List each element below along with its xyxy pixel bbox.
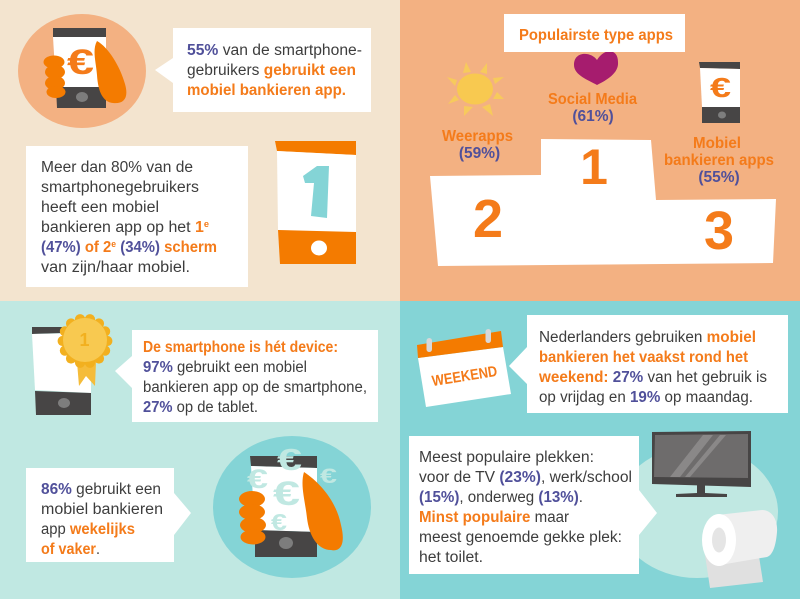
podium: 2 [473,189,503,249]
text block: first or second screen: scherm [164,239,217,256]
callout: popular places: Meest populaire plekken: [419,449,594,466]
icon: heart [574,51,618,85]
podium: 3 [704,201,734,261]
text block: first or second screen: (47%) of 2 [41,239,112,256]
callout: device: 97% gebruikt een mobiel [143,359,307,376]
label: mobile banking apps [664,135,774,186]
text block: first or second screen: van zijn/haar mobiel. [41,259,190,276]
callout: weekly use [26,468,191,562]
panel: when and where [400,301,800,599]
callout: weekend usage: weekend: 27% van het gebruik is [538,369,767,386]
label: weather apps: (59%) [459,145,500,162]
callout: popular places: Minst populaire maar [419,509,569,526]
text block: first or second screen: e [111,239,116,249]
icon: phone with euro: € [710,72,732,103]
icon: hand holding phone with euro [18,14,146,128]
callout: weekly use: mobiel bankieren [41,501,163,518]
label: mobile banking apps: bankieren apps [664,152,774,169]
icon: hand holding phone with euros: € [271,509,287,535]
background blob behind TV and toilet roll [616,446,778,578]
icon: weekend calendar: WEEKEND [431,363,499,390]
icon: phone with medal: 1 [79,330,90,350]
callout: device [115,330,378,422]
icon: weekend calendar [417,329,511,407]
callout: popular places: voor de TV (23%), werk/school [419,469,632,486]
callout: device: bankieren app op de smartphone, [143,379,367,396]
icon: television [652,431,751,497]
callout: weekend usage: Nederlanders gebruiken mobiel [539,329,756,346]
panel: smartphone as device [0,301,400,599]
text block: first or second screen: e [204,219,209,229]
icon: hand holding phone with euros: € [273,475,300,513]
panel: most popular app types [400,0,800,301]
icon: hand holding phone with euro: € [67,43,94,82]
label: weather apps: Weerapps [442,128,513,145]
icon: sun [447,62,504,116]
heading: popular apps: Populairste type apps [519,27,673,44]
icon: phone with number one [275,141,356,264]
icon: hand holding phone with euros [213,436,371,578]
callout: popular places [409,436,657,574]
label: weather apps [442,128,513,162]
podium [430,139,776,266]
icon: phone with euro [699,62,740,123]
callout: popular places: het toilet. [419,549,483,566]
callout: popular places: (15%), onderweg (13%). [419,489,583,506]
callout: weekly use: of vaker. [41,541,100,558]
text block: first or second screen: smartphonegebruikers [41,179,199,196]
callout: weekly use: app wekelijks [41,521,135,538]
callout: weekend usage [509,315,788,413]
callout: 55 percent [155,28,371,112]
label: social media [548,91,637,125]
icon: hand holding phone with euros: € [277,442,302,477]
label: mobile banking apps: (55%) [698,169,740,186]
callout: device: De smartphone is hét device: [143,339,338,356]
text block: first or second screen: bankieren app op het 1 [41,219,204,236]
callout: weekend usage: op vrijdag en 19% op maandag. [539,389,753,406]
callout: device: 27% op de tablet. [143,399,258,416]
text block: first or second screen: heeft een mobiel [41,199,159,216]
icon: phone with medal [32,314,112,415]
callout: popular places: meest genoemde gekke plek: [419,529,622,546]
text block: first or second screen: (34%) [120,239,160,256]
icon: hand holding phone with euros: € [247,464,268,494]
callout: 55 percent: mobiel bankieren app. [187,82,346,99]
icon: toilet roll [702,510,777,588]
podium: 1 [580,139,608,195]
callout: weekend usage: bankieren het vaakst rond het [539,349,748,366]
callout: weekly use: 86% gebruikt een [41,481,161,498]
icon: hand holding phone with euros: € [320,465,337,488]
callout: 55 percent: 55% van de smartphone- [187,42,362,59]
label: mobile banking apps: Mobiel [693,135,741,152]
text block: first or second screen: Meer dan 80% van de [41,159,193,176]
panel: mobile banking usage [0,0,400,301]
label: social media: Social Media [548,91,637,108]
text block: first or second screen [26,146,248,287]
callout: 55 percent: gebruikers gebruikt een [187,62,356,79]
heading: popular apps [504,14,685,52]
label: social media: (61%) [572,108,614,125]
